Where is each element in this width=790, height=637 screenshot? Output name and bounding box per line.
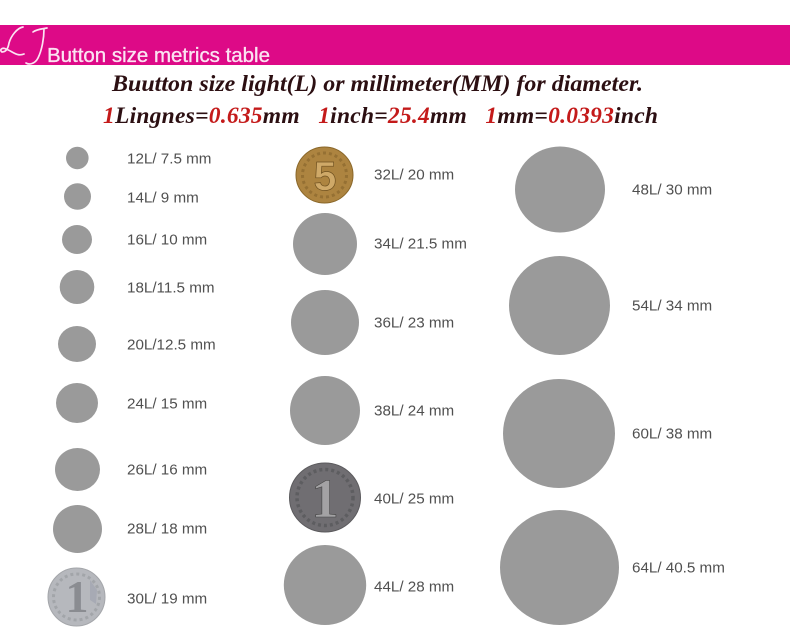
logo script LJ: [1, 27, 47, 64]
heading line 2: unit conversions: 1Lingnes=0.635mm 1inch=25.4mm 1mm=0.0393inch: [103, 103, 658, 129]
40L dark one yuan coin: 1: [311, 468, 339, 529]
column 3 sizes: [500, 146, 725, 625]
20L button: 20L/12.5 mm: [127, 337, 216, 354]
20L button: [58, 326, 216, 362]
26L button: [55, 448, 207, 491]
36L button: [291, 290, 454, 355]
14L button: 14L/ 9 mm: [127, 190, 199, 207]
44L button: [284, 545, 454, 625]
64L button: 64L/ 40.5 mm: [632, 560, 725, 577]
16L button: 16L/ 10 mm: [127, 232, 207, 249]
12L button: 12L/ 7.5 mm: [127, 151, 211, 168]
column 2 sizes: [284, 147, 467, 625]
24L button: 24L/ 15 mm: [127, 396, 207, 413]
36L button: 36L/ 23 mm: [374, 315, 454, 332]
34L button: 34L/ 21.5 mm: [374, 236, 467, 253]
48L button: [515, 146, 712, 232]
column 1 sizes: [48, 147, 216, 626]
18L button: [60, 270, 215, 304]
banner title: Button size metrics table: [47, 44, 270, 67]
26L button: 26L/ 16 mm: [127, 462, 207, 479]
44L button: 44L/ 28 mm: [374, 579, 454, 596]
54L button: [509, 256, 712, 355]
24L button: [56, 383, 207, 423]
header banner: [0, 25, 790, 67]
60L button: [503, 379, 712, 488]
40L dark one yuan coin: 40L/ 25 mm: [374, 491, 454, 508]
60L button: 60L/ 38 mm: [632, 426, 712, 443]
12L button: [66, 147, 211, 169]
30L silver one yuan coin: [48, 568, 207, 626]
28L button: 28L/ 18 mm: [127, 521, 207, 538]
48L button: 48L/ 30 mm: [632, 182, 712, 199]
28L button: [53, 505, 207, 553]
64L button: [500, 510, 725, 625]
32L gold five jiao coin: 32L/ 20 mm: [374, 167, 454, 184]
38L button: [290, 376, 454, 445]
32L gold five jiao coin: 5: [314, 153, 336, 199]
30L silver one yuan coin: 30L/ 19 mm: [127, 591, 207, 608]
30L silver one yuan coin: 1: [66, 571, 88, 622]
18L button: 18L/11.5 mm: [127, 280, 215, 297]
34L button: [293, 213, 467, 275]
38L button: 38L/ 24 mm: [374, 403, 454, 420]
54L button: 54L/ 34 mm: [632, 298, 712, 315]
14L button: [64, 183, 199, 210]
32L gold five jiao coin: [296, 147, 454, 203]
40L dark one yuan coin: [290, 463, 454, 532]
heading line 1: Buutton size light(L) or millimeter(MM) for diameter.: [111, 71, 643, 97]
16L button: [62, 225, 207, 254]
